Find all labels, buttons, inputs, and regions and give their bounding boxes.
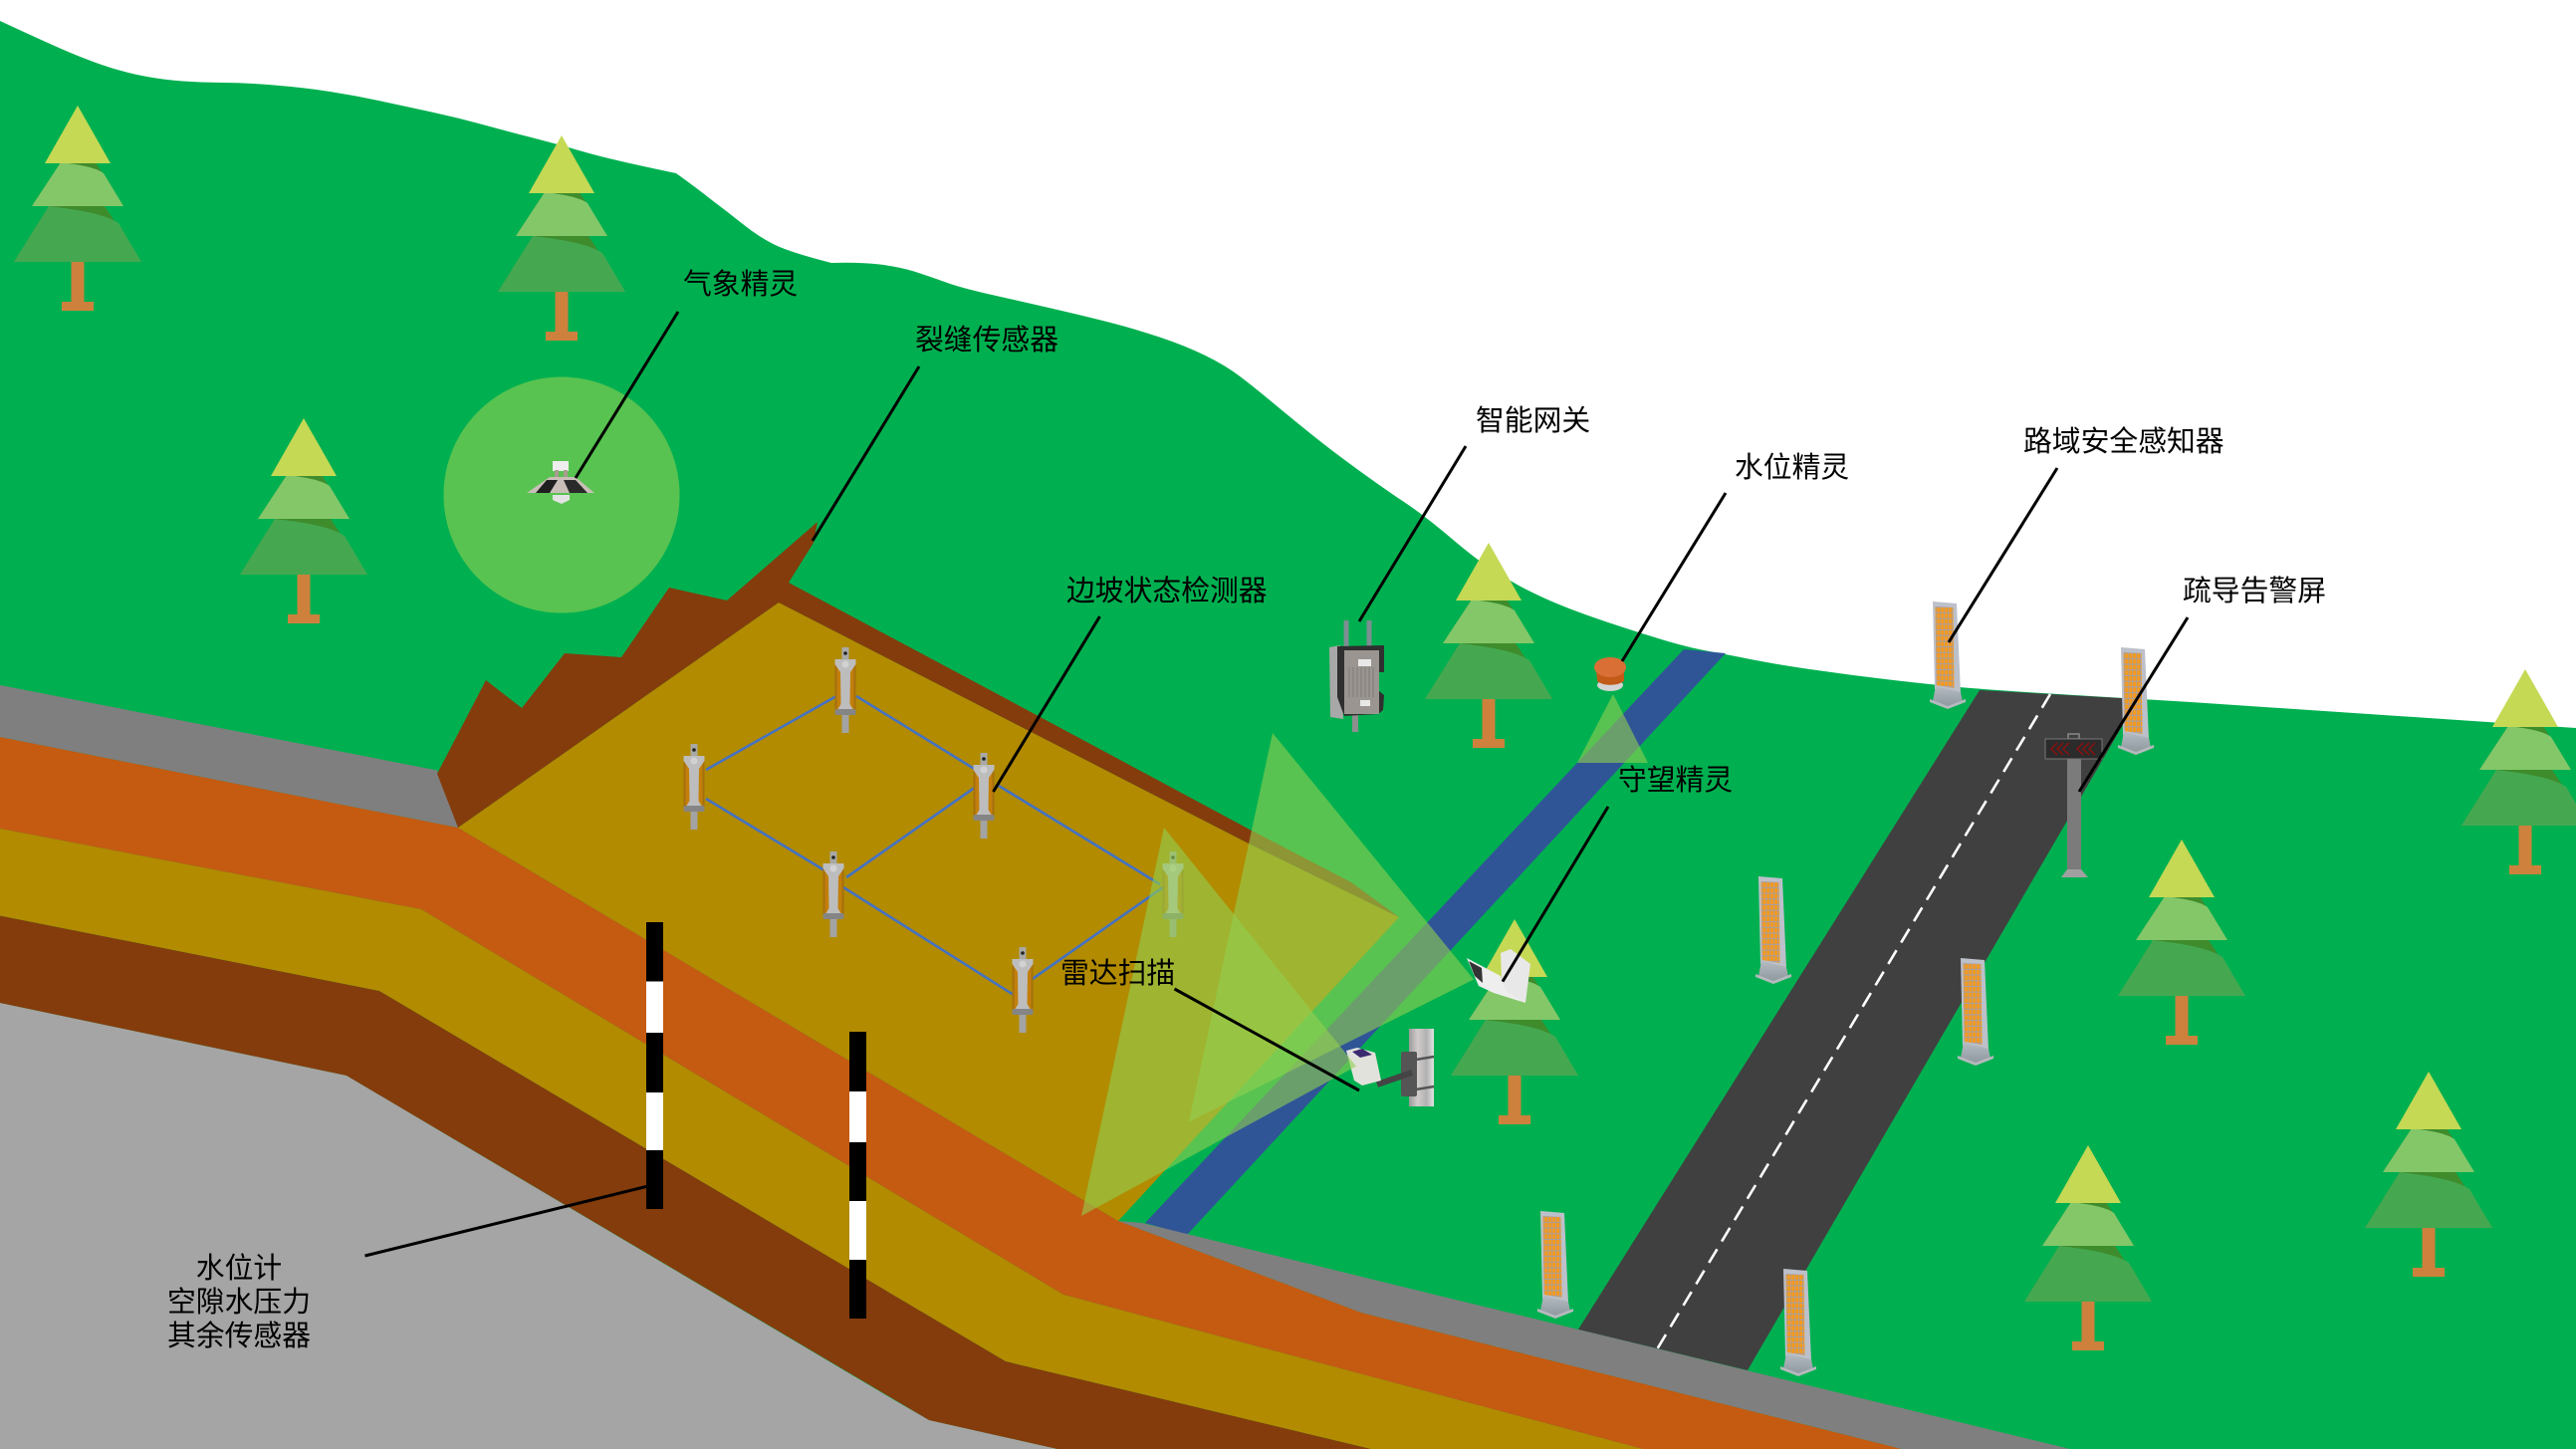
crack zone [437, 522, 1399, 917]
leader: road sensor [1949, 468, 2057, 642]
road shoulder right [1118, 1221, 2070, 1449]
leader: weather sprite [576, 312, 678, 478]
label: warning screen: 疏导告警屏 [2183, 576, 2326, 607]
tree [240, 418, 367, 623]
label: water gauge group [167, 1253, 311, 1352]
leader: slope detector [994, 616, 1099, 792]
water level gauge 2 [849, 1032, 866, 1319]
icon: weather sprite [527, 461, 594, 504]
label: water level sprite: 水位精灵 [1735, 452, 1849, 484]
tree [14, 106, 141, 311]
upper soil layer [0, 737, 1902, 1449]
icon: radar scanner [1346, 1029, 1434, 1106]
tree [1451, 919, 1578, 1124]
tree [2461, 669, 2576, 874]
leader: radar [1175, 989, 1359, 1090]
stream [1145, 649, 1726, 1235]
label: watch sprite: 守望精灵 [1618, 765, 1733, 797]
bedrock layer [0, 1003, 1057, 1449]
weather coverage circle [444, 376, 679, 613]
tree [2024, 1145, 2152, 1350]
watch sprite cone [1189, 733, 1474, 1121]
leader: water gauge [364, 1186, 648, 1256]
icon: warning screen [2045, 734, 2102, 877]
leader: warning screen [2079, 617, 2188, 792]
label: slope state detector: 边坡状态检测器 [1066, 576, 1268, 607]
water level sprite cone [1577, 694, 1648, 763]
label: crack sensor: 裂缝传感器 [915, 325, 1058, 357]
tree [1425, 543, 1552, 748]
icon: watch sprite [1467, 949, 1530, 1003]
label: smart gateway: 智能网关 [1476, 405, 1590, 437]
slope state detectors [683, 647, 1183, 1033]
sensor network links [706, 696, 1163, 995]
icon: water level sprite [1594, 657, 1626, 691]
radar scan cone [1081, 828, 1356, 1216]
label: water gauge group: 空隙水压力 [167, 1287, 311, 1319]
landslide body [458, 603, 1399, 1221]
leader: crack sensor [813, 366, 919, 541]
leader: watch sprite [1503, 807, 1608, 982]
tree [2365, 1072, 2492, 1277]
label: road safety sensor: 路域安全感知器 [2023, 426, 2225, 458]
road safety sensors [1537, 602, 2154, 1376]
water level gauge 1 [646, 922, 663, 1209]
label: water gauge group: 其余传感器 [167, 1321, 311, 1352]
road [1578, 690, 2138, 1370]
tree [2118, 840, 2245, 1045]
label: weather sprite: 气象精灵 [683, 269, 798, 301]
leader: water sprite [1622, 493, 1726, 661]
road shoulder left [0, 685, 458, 828]
middle soil layer [0, 829, 1643, 1449]
deep soil layer [0, 916, 1371, 1449]
label: radar scan: 雷达扫描 [1060, 958, 1175, 990]
tree [498, 135, 625, 341]
leader: gateway [1359, 446, 1466, 621]
label: water gauge group: 水位计 [196, 1253, 282, 1285]
icon: smart gateway [1329, 620, 1384, 732]
